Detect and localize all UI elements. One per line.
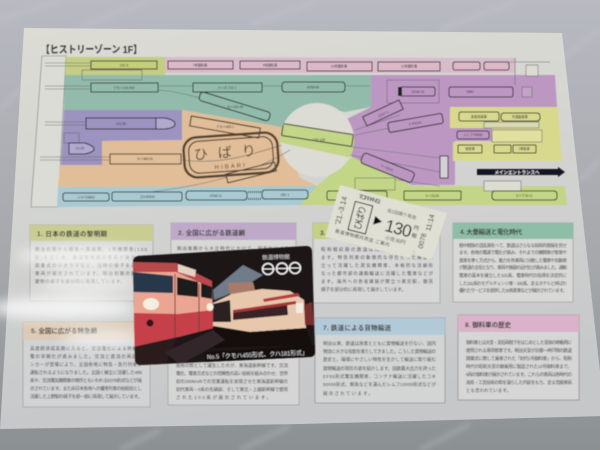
panel 4 body: した151系のモデルチェンジ車・181系、走るホテルと呼ばれ (459, 280, 568, 287)
train: imperial cars row (168, 61, 509, 71)
panel 3 body: なった都市部の通勤輸送に活躍した電車などが (321, 270, 434, 277)
rotunda turntable (280, 103, 354, 177)
trains: ハニフ PM50 (464, 132, 483, 137)
trains: 3950 (466, 90, 474, 94)
card: right train, cream (213, 282, 314, 348)
card: left train, red and cream (133, 262, 225, 366)
trains: 1等客車 (518, 146, 530, 151)
zone: green strip (300, 157, 567, 205)
panel 3 body: 様子を部分的に再現して展示しています。 (321, 286, 406, 293)
train: orange zone (190, 116, 260, 138)
stamp: hibari: ひばり (193, 142, 256, 163)
panel 1 body: 明治初期から戦後へ発展期、1号機関車(150 (35, 246, 147, 253)
panel 5 body: 系や、交流電気機関車の傑作ともいわれるED75形式などが展 (30, 377, 142, 384)
panel 7: 鉄道による貨物輸送 (315, 318, 445, 403)
panel 8 body: 御料車とは天皇・皇后両陛下をはじめとした皇族の移動用に (466, 339, 572, 346)
train: imperial cars row: 9号御料車 (263, 62, 278, 68)
trains: キハ484-51 (137, 157, 153, 161)
train: olive row (91, 61, 157, 69)
panel 3 header (313, 223, 440, 239)
card: logo rings (262, 262, 301, 274)
map frame (31, 56, 66, 207)
panel 4 body: 戦中戦後の混乱期をへて、鉄道はさらなる技術的発展を見せ (459, 242, 568, 249)
trains: マイテ39 11 (515, 193, 533, 198)
zone: pink strip (165, 57, 515, 73)
trains: ナハネフ22 1 (218, 85, 237, 90)
panel 5: 全国に拡がる特急網 (23, 322, 150, 407)
panel 5 body: 活躍した上野駅の様子を部一部に再現して展示しています。 (30, 393, 142, 400)
group: printed sheet content (23, 44, 579, 407)
panel 3: 鉄道黄金期 (313, 223, 440, 303)
panel 8 body: 6両の御料車が展示されています。これらの車両は各時代の (466, 371, 572, 378)
ticket: time: 11:14 (425, 214, 436, 232)
panel 2 header (171, 223, 296, 240)
trains: カハ181-45 (227, 104, 243, 109)
ticket: entrance ticket (325, 185, 447, 260)
panel 8 body: 美術・工芸技術の粋を凝らした内装をもち、走る宮殿車両 (466, 379, 572, 386)
panel 7 body: 展示されています。 (323, 390, 373, 397)
panel 4 body: 貨車を牽く方式から、動力を各車両に分散した電車や気動車 (459, 257, 568, 264)
trains: ED17 1 (378, 110, 389, 118)
train: yellow zone (459, 112, 499, 121)
ticket: maker code: TOPPAN51 (358, 194, 382, 206)
panel 6 body: 初代車両・0系の先頭部、そして東北・上越新幹線で使用 (176, 386, 288, 393)
panel 7 header (315, 318, 445, 335)
trains: キハ3126 (425, 194, 439, 198)
zone: orange (58, 110, 320, 187)
trains: コキ50000 (139, 195, 155, 199)
trains: EF66 11 (210, 194, 222, 198)
panel 1 body: 開業式のジオラマなど、当時の様子を再現し (35, 262, 148, 269)
trains: シキ710800 (77, 196, 95, 200)
ticket: arrow (373, 216, 383, 227)
train: green strip (327, 191, 387, 200)
panel 5 header (23, 322, 150, 340)
ticket: stamp box: ひばり (352, 204, 369, 231)
panel 8: 御料車の歴史 (458, 315, 579, 400)
panel 8 body (466, 339, 572, 394)
panel 2 body: 明治後期から大正時代にかけて、国有化により (177, 245, 289, 252)
panel 5: 全国に拡がる特急網: 5. 全国に広がる特急網 (31, 326, 98, 335)
panel 1 header (30, 225, 153, 241)
panel 3 body (321, 246, 434, 293)
trains: C51 5 (120, 64, 128, 68)
panel 6: 新幹線の登場 (168, 340, 299, 405)
train: mauve zone (400, 87, 435, 96)
panel 1 body (35, 246, 148, 285)
card: museum name: 鉄道博物館 (262, 253, 290, 261)
panel 7 body: 歴史と、環境にやさしい特性を生かして輸送に取り組む (323, 356, 436, 363)
zone: yellow (450, 107, 562, 161)
panel 3 body: 立って活躍した蒸気機関車、本格的な流線形 (321, 262, 434, 269)
ticket: date: '21.-3.14 (333, 195, 349, 226)
panel 1 body: 形)をはじめ、鉄道黎明期の車両が展示され (35, 254, 148, 261)
glare on plastic sleeve (0, 246, 142, 347)
zone: purple (61, 110, 182, 165)
panel 5 body: ンカーが登場により、全国各地に特急・急行列車が (30, 361, 142, 368)
card: railway museum prepaid card (133, 246, 315, 366)
panel 2: 全国に広がる鉄道網: 2. 全国に広がる鉄道網 (178, 228, 246, 237)
panel 5 body: 示されています。また非日本各地への優等列車の始祖役とし (30, 385, 142, 392)
zone: teal (64, 75, 371, 128)
panel 1 body: 車両が展示されています。明治初期の鉄道の (35, 270, 148, 277)
panel 7 body: 明治以来、鉄道は旅客とともに貨物輸送を行ない、国内 (323, 340, 436, 347)
trains: 外国製客車 (512, 114, 529, 119)
panel 4: 大量輸送と電化時代: 4. 大量輸送と電化時代 (460, 227, 522, 236)
trains: ナデ6141 (408, 119, 422, 127)
card: caption band (205, 345, 315, 364)
panel 3 body: ます。特急列車の象徴的な存在だった展望車 (321, 254, 434, 261)
ticket: serial: 0078 (418, 233, 428, 250)
card: caption: No.5「クモハ455形式、クハ181形式」 (207, 349, 308, 361)
panel 7 body: 物流に大きな役割を果たしてきました。こうした貨物輸送の (323, 348, 436, 355)
panel 4 body: 電車の基本を確立した101系、電車時代の指導を決定的に (459, 272, 568, 279)
panel 5 body (30, 345, 142, 400)
panel 3 body: 昭和戦前期の鉄道は飛躍的な発展を遂げて (321, 246, 433, 253)
zone: mauve (345, 75, 557, 185)
train: purple zone (86, 118, 156, 129)
panel 6 body (176, 362, 288, 401)
ticket: fare: 130 (383, 216, 414, 241)
trains: 旅客用客車 (471, 114, 488, 119)
panel 6 body: 技術の粋として誕生したのが、東海道新幹線です。交流 (176, 362, 288, 369)
ticket: issuer line: 当1回限り有効 (386, 207, 418, 221)
panel 8 header (458, 315, 579, 332)
ticket: entrance ticket: 円 (413, 224, 420, 232)
card: headlights (143, 298, 159, 310)
panel 4 body: 優れたサービスを提供した20系客車などが展示されています。 (459, 287, 567, 294)
ticket: footer: 鉄道博物館内売店 ご案内 (334, 227, 391, 249)
arrow: main entrance: メインエントランスへ (495, 170, 540, 176)
card: roof structure (213, 265, 263, 300)
train: imperial cars row: 10号御料車 (331, 64, 348, 68)
train: light blue strip (63, 193, 109, 201)
trains: ED40 10 (412, 90, 424, 94)
stamp: hibari: HIBARI (215, 163, 247, 171)
map: floor plan of history zone: C57 135 (313, 138, 325, 142)
train: imperial cars row: 12号御料車 (401, 64, 418, 68)
trains: 21-25 (76, 146, 84, 150)
panel 7 body (323, 340, 436, 397)
panel 8 body: 開業式に際して乗車された「初代1号御料車」から、昭和 (466, 355, 572, 362)
trains: 貴賓車 (465, 146, 476, 151)
trains: EF58 89 (307, 86, 319, 90)
panel 8: 御料車の歴史: 8. 御料車の歴史 (465, 320, 512, 329)
panel 5 body: 電の早期化が進みました。交流と直流の両区間 (30, 353, 142, 360)
panel 6 body: された200系が展示されています。 (176, 394, 271, 401)
ticket: entrance ticket: 税 (411, 231, 419, 240)
panel 7 body: 貨物輸送の現在の姿を紹介します。国鉄最大出力を誇った (323, 365, 436, 372)
panel 1 body: 建物の様子を部分的に再現しています。 (35, 278, 125, 285)
panel 1: 日本の鉄道の黎明期 (30, 225, 153, 301)
panel 7 body: EF66形式電気機関車、コンテナ輸送に活躍したコキ (323, 373, 436, 380)
trains: ナハ6141 (380, 163, 395, 172)
panel 7: 鉄道による貨物輸送: 7. 鉄道による貨物輸送 (323, 323, 392, 332)
panel 4 body (459, 242, 568, 294)
panel 5 body: 運転されるようになりました。全国く線全に活躍した485 (30, 369, 142, 376)
trains: D51 1 (281, 193, 289, 197)
trains: クモハ455-1 (216, 124, 234, 129)
panel 4 header (453, 223, 573, 239)
panel 4 body: ます。各地の電源で電化が進み、それまでの機関車が客車や (459, 249, 568, 256)
panel 8 body: 時代の昭和天皇の御乗用に製造された12号御料車まで、 (466, 363, 572, 370)
arrow: main entrance (477, 167, 565, 177)
ticket: child fare: 小児 60円 (384, 234, 406, 246)
panel 4 body: が鉄道の主役となり、車両や施設の近代化が進みました。通勤 (459, 264, 568, 271)
panel 6 body: 初の200km/hでの営業運転を実現させた東海道新幹線の (176, 378, 288, 385)
panel 8 body: 使用される専用客車です。明治天皇が京都〜神戸間の鉄道 (466, 347, 572, 354)
trains: 222-35 (116, 122, 126, 126)
panel 3: 鉄道黄金期: 3. (320, 230, 326, 237)
zone: olive (65, 57, 165, 75)
panel 4: 大量輸送と電化時代 (453, 223, 573, 302)
panel 7 body: 50000形式、鮮魚などを運んだレムフ10000形式などが (323, 381, 436, 388)
map: floor plan of history zone (31, 56, 567, 207)
panel 2: 全国に広がる鉄道網 (171, 223, 296, 263)
panel 5 body: 高度経済成長期に入ると、交流電化による幹線の (30, 345, 142, 352)
stamp: hibari (183, 132, 279, 178)
train: imperial cars row: 7号御料車 (193, 62, 208, 68)
train: teal row (91, 83, 158, 92)
trains (63, 61, 557, 201)
tracks (40, 58, 550, 192)
zone: light blue strip (57, 186, 320, 207)
panel 8 body: とも言われています。 (466, 387, 511, 394)
panel 6 body: 電化、電車方式などの信頼性の高い技術を組み合わせ、世界 (176, 370, 288, 377)
title: 【ヒストリーゾーン 1F】 (41, 44, 142, 56)
trains: クモハ101-902 (113, 85, 135, 90)
panel 1: 日本の鉄道の黎明期: 1. 日本の鉄道の黎明期 (37, 229, 108, 238)
turntable track with locomotive (278, 124, 355, 158)
panel 3 body: ます。海外への各省庫展が際立つ東京駅、御茶 (321, 278, 434, 285)
